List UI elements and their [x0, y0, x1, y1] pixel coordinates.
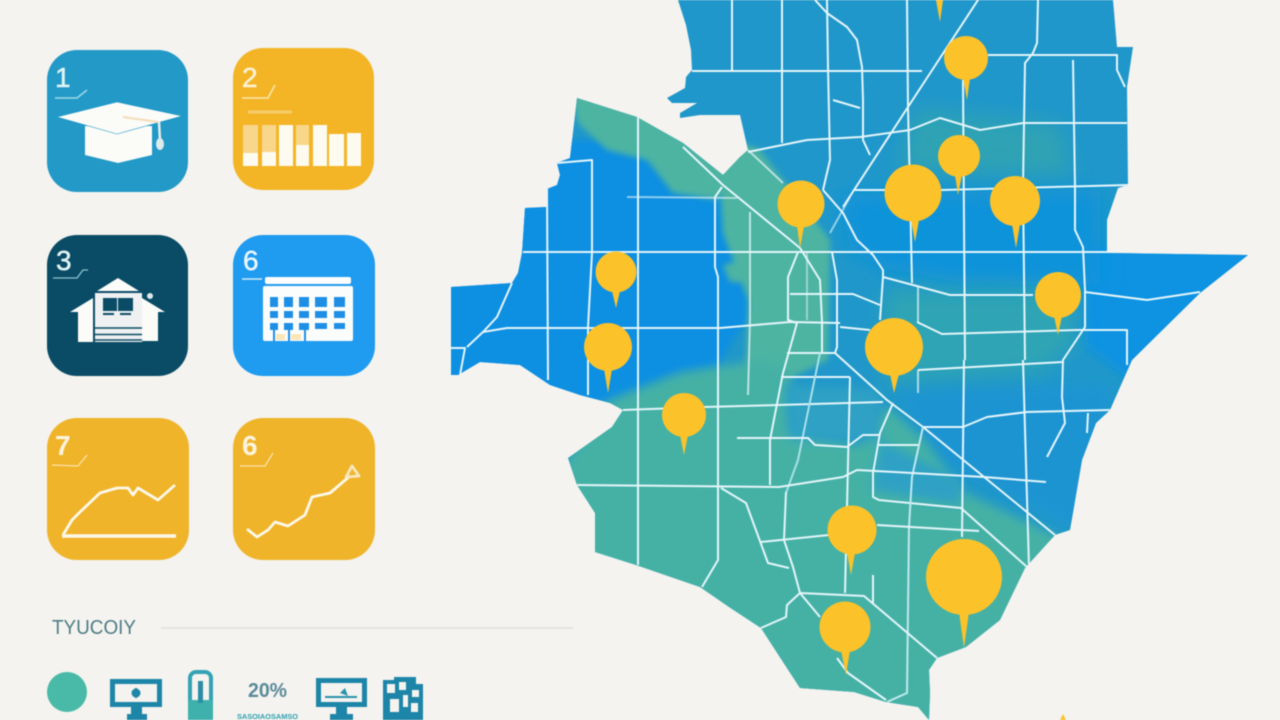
- legend stat: 20%: [248, 680, 287, 702]
- legend icon: monitor 1: [112, 682, 160, 720]
- bright blue west zone: [440, 140, 750, 420]
- base region colour: [440, 0, 1260, 720]
- teal centre east lower: [885, 290, 1075, 382]
- legend title: TYUCOIY: [52, 617, 136, 639]
- panel: numbered icon cards: [47, 48, 375, 560]
- blue south east zone: [932, 394, 1108, 523]
- icon: graduation cap: [57, 102, 182, 163]
- pin top tail: [936, 0, 943, 22]
- icon: calendar: [263, 277, 353, 341]
- pin 2: [938, 135, 980, 195]
- icon: school building: [70, 278, 165, 342]
- pin 8: [584, 323, 632, 393]
- legend section: [47, 617, 573, 720]
- mixed blue-teal block: [785, 385, 960, 505]
- green central strip: [718, 150, 830, 385]
- pin 4: [990, 176, 1040, 248]
- pin 10: [662, 393, 706, 455]
- pin 6: [1035, 272, 1081, 335]
- green north west strip: [570, 90, 760, 200]
- number 1: 1: [55, 62, 71, 93]
- card 1: graduation cap: [47, 50, 188, 192]
- pin 9: [865, 318, 923, 393]
- legend icon: teal circle: [47, 672, 87, 712]
- map location pins: [584, 0, 1081, 720]
- green blob beside centre: [723, 260, 745, 282]
- map of districts: [440, 0, 1260, 720]
- legend icon: phone: [188, 672, 213, 720]
- card 6: rising line chart: [233, 418, 375, 560]
- card 4: calendar: [233, 235, 375, 376]
- legend stat: [237, 680, 298, 720]
- card 2: bar chart: [233, 48, 374, 190]
- pin 1: [944, 36, 988, 100]
- pin 12: [926, 539, 1002, 648]
- blue east arm: [1085, 245, 1260, 380]
- blue band across the middle: [840, 190, 1100, 285]
- pin 11: [828, 506, 876, 575]
- card 5: area line chart: [47, 418, 189, 560]
- rising line: [247, 466, 359, 537]
- pin 5: [778, 180, 824, 248]
- pin 7: [596, 252, 636, 308]
- legend icon: city blocks: [383, 677, 423, 720]
- pin 14 tip: [1060, 714, 1066, 720]
- line chart: [62, 485, 176, 536]
- number 7: 7: [55, 430, 71, 461]
- teal centre east upper: [900, 110, 1072, 175]
- pin 13: [820, 602, 870, 675]
- number 6: 6: [243, 245, 259, 276]
- card 3: building: [47, 235, 188, 376]
- number 3: 3: [56, 245, 72, 276]
- south green zone: [560, 360, 1065, 720]
- number 6: 6: [242, 430, 258, 461]
- number 2: 2: [242, 62, 258, 93]
- bar chart icon: [243, 125, 361, 166]
- road network: [451, 0, 1200, 702]
- pin 3: [884, 164, 942, 242]
- legend icon: monitor 2: [318, 680, 364, 720]
